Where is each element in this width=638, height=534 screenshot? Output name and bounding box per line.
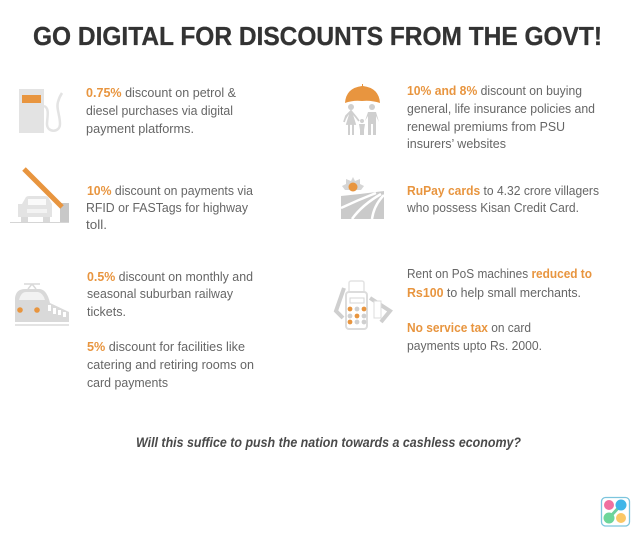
text: toll discount: 10% discount on payments via [87, 183, 254, 198]
closing question: Will this suffice to push the nation towards a cashless economy? [136, 434, 521, 450]
text: PoS rent [407, 266, 592, 300]
panel: RuPay cards [341, 177, 599, 219]
text: petrol discount: payment platforms. [86, 121, 194, 136]
text: railway discount: 0.5% discount on monthly and [87, 269, 253, 284]
text: insurance discount [407, 83, 595, 151]
panel: petrol discount [19, 85, 236, 136]
panel: railway discount [15, 269, 254, 390]
panel: insurance discount [344, 83, 595, 151]
title: GO DIGITAL FOR DISCOUNTS FROM THE GOVT! [33, 21, 602, 51]
text: petrol discount [86, 85, 236, 136]
panel: toll discount [10, 169, 254, 232]
text: catering discount [87, 339, 254, 390]
text: catering discount: card payments [87, 375, 168, 390]
icon: train [15, 284, 69, 326]
panel: PoS machines [336, 266, 592, 353]
icon: card payment machine [336, 281, 390, 329]
icon: car at toll barrier [10, 169, 69, 223]
text: insurance discount: 10% and 8% discount on buying [407, 83, 582, 98]
text: railway discount [87, 269, 253, 319]
text: insurance discount: general, life insurance policies and [407, 101, 595, 116]
text: RuPay cards [406, 183, 599, 215]
text: no service tax [407, 320, 542, 353]
text: no service tax: No service tax on card [407, 320, 531, 335]
text: toll discount: toll. [86, 217, 107, 232]
icon: fuel pump [19, 89, 62, 133]
text: toll discount: RFID or FASTags for highway [86, 200, 248, 215]
text: RuPay cards: who possess Kisan Credit Card. [406, 200, 579, 215]
icon: logo [602, 498, 630, 526]
text: petrol discount: 0.75% discount on petrol & [86, 85, 236, 100]
text: railway discount: tickets. [87, 304, 126, 319]
text: toll discount [86, 183, 254, 232]
icon: sun over field [341, 177, 384, 219]
text: insurance discount: insurers’ websites [407, 136, 506, 151]
text: insurance discount: renewal premiums from PSU [407, 119, 565, 134]
text: PoS rent: Rs100 to help small merchants. [407, 285, 581, 300]
text: PoS rent: Rent on PoS machines reduced to [407, 266, 592, 281]
text: railway discount: seasonal suburban railway [87, 286, 233, 301]
text: petrol discount: diesel purchases via digital [86, 103, 233, 118]
text: no service tax: payments upto Rs. 2000. [407, 338, 542, 353]
icon: family under umbrella [344, 84, 380, 135]
text: RuPay cards: RuPay cards to 4.32 crore villagers [407, 183, 599, 198]
text: catering discount: catering and retiring rooms on [87, 357, 254, 372]
text: catering discount: 5% discount for facilities like [87, 339, 245, 354]
